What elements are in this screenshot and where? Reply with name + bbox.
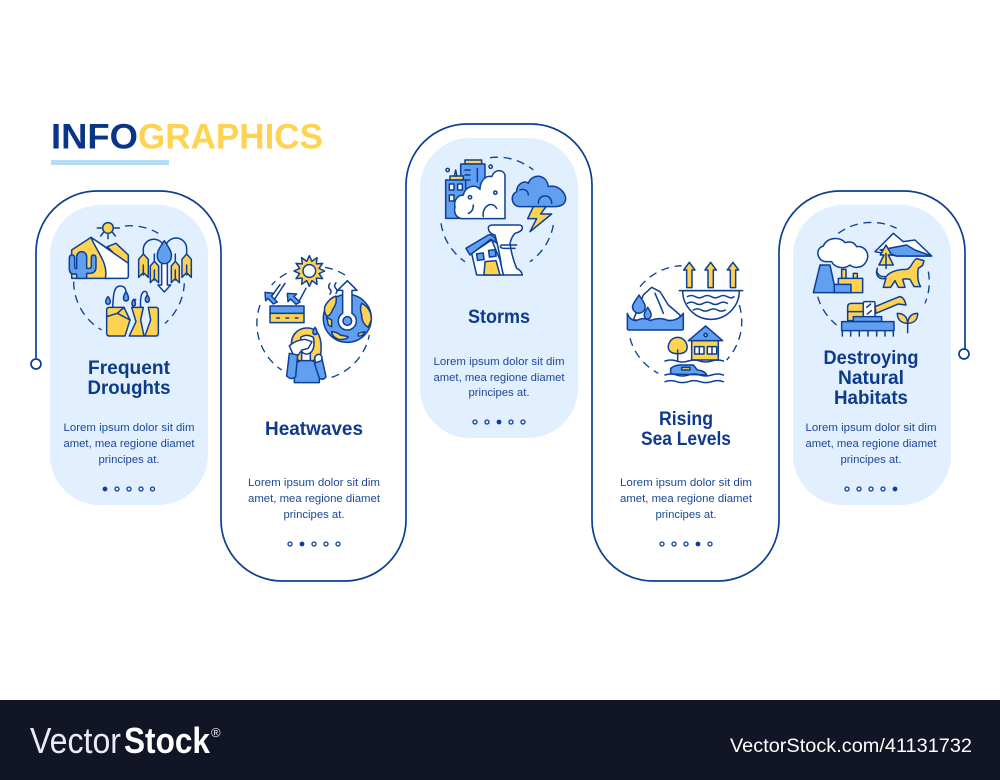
body text: Lorem ipsum dolor sit dim <box>806 422 936 434</box>
body text: amet, mea regione diamet <box>248 493 380 505</box>
pagination dots <box>660 542 712 546</box>
body text: principes at. <box>656 509 716 521</box>
footer bar <box>0 700 1000 780</box>
body text: Lorem ipsum dolor sit dim <box>620 477 752 489</box>
body text: Lorem ipsum dolor sit dim <box>64 422 194 434</box>
body text: principes at. <box>98 454 160 466</box>
footer logo <box>30 720 221 761</box>
connecting outline <box>36 124 965 581</box>
title: INFO <box>51 118 138 156</box>
icon: storms <box>441 157 566 275</box>
panel: rising sea levels <box>620 262 752 546</box>
body text: Lorem ipsum dolor sit dim <box>248 477 380 489</box>
body text: principes at. <box>840 454 902 466</box>
icon: habitats <box>813 222 932 336</box>
panel: storms <box>420 138 578 438</box>
body text <box>64 422 194 466</box>
panel: heatwaves <box>248 256 380 546</box>
heading line 2: Droughts <box>88 378 170 399</box>
pagination dots <box>473 420 525 424</box>
icon: sea levels <box>627 262 743 383</box>
body text: principes at. <box>468 387 530 399</box>
body text: amet, mea regione diamet <box>806 438 936 450</box>
footer id: VectorStock.com/41131732 <box>730 736 972 757</box>
heading line 3: Habitats <box>834 388 908 409</box>
footer logo: Stock <box>124 720 211 761</box>
icon: heatwaves <box>257 256 371 383</box>
heading: Frequent <box>88 358 171 379</box>
start marker <box>31 359 41 369</box>
body text <box>248 477 380 521</box>
heading: Destroying <box>824 348 918 369</box>
panel: destroying natural habitats <box>793 205 951 505</box>
body text: amet, mea regione diamet <box>434 372 564 384</box>
pagination dots <box>845 487 897 491</box>
icon: droughts <box>69 223 191 336</box>
footer logo: Vector <box>30 720 121 761</box>
title <box>51 118 323 165</box>
pagination dots <box>288 542 340 546</box>
body text: amet, mea regione diamet <box>620 493 752 505</box>
end marker <box>959 349 969 359</box>
body text: Lorem ipsum dolor sit dim <box>434 356 564 368</box>
heading: Storms <box>468 307 530 328</box>
heading line 2: Sea Levels <box>641 429 731 450</box>
heading line 2: Natural <box>838 368 904 389</box>
footer logo: ® <box>211 725 221 740</box>
title: GRAPHICS <box>138 118 323 156</box>
body text <box>806 422 936 466</box>
body text <box>620 477 752 521</box>
pagination dots <box>103 487 154 491</box>
heading: Heatwaves <box>265 419 363 440</box>
body text: principes at. <box>284 509 344 521</box>
body text <box>434 356 564 399</box>
body text: amet, mea regione diamet <box>64 438 194 450</box>
panel: frequent droughts <box>50 205 208 505</box>
heading: Rising <box>659 409 713 430</box>
